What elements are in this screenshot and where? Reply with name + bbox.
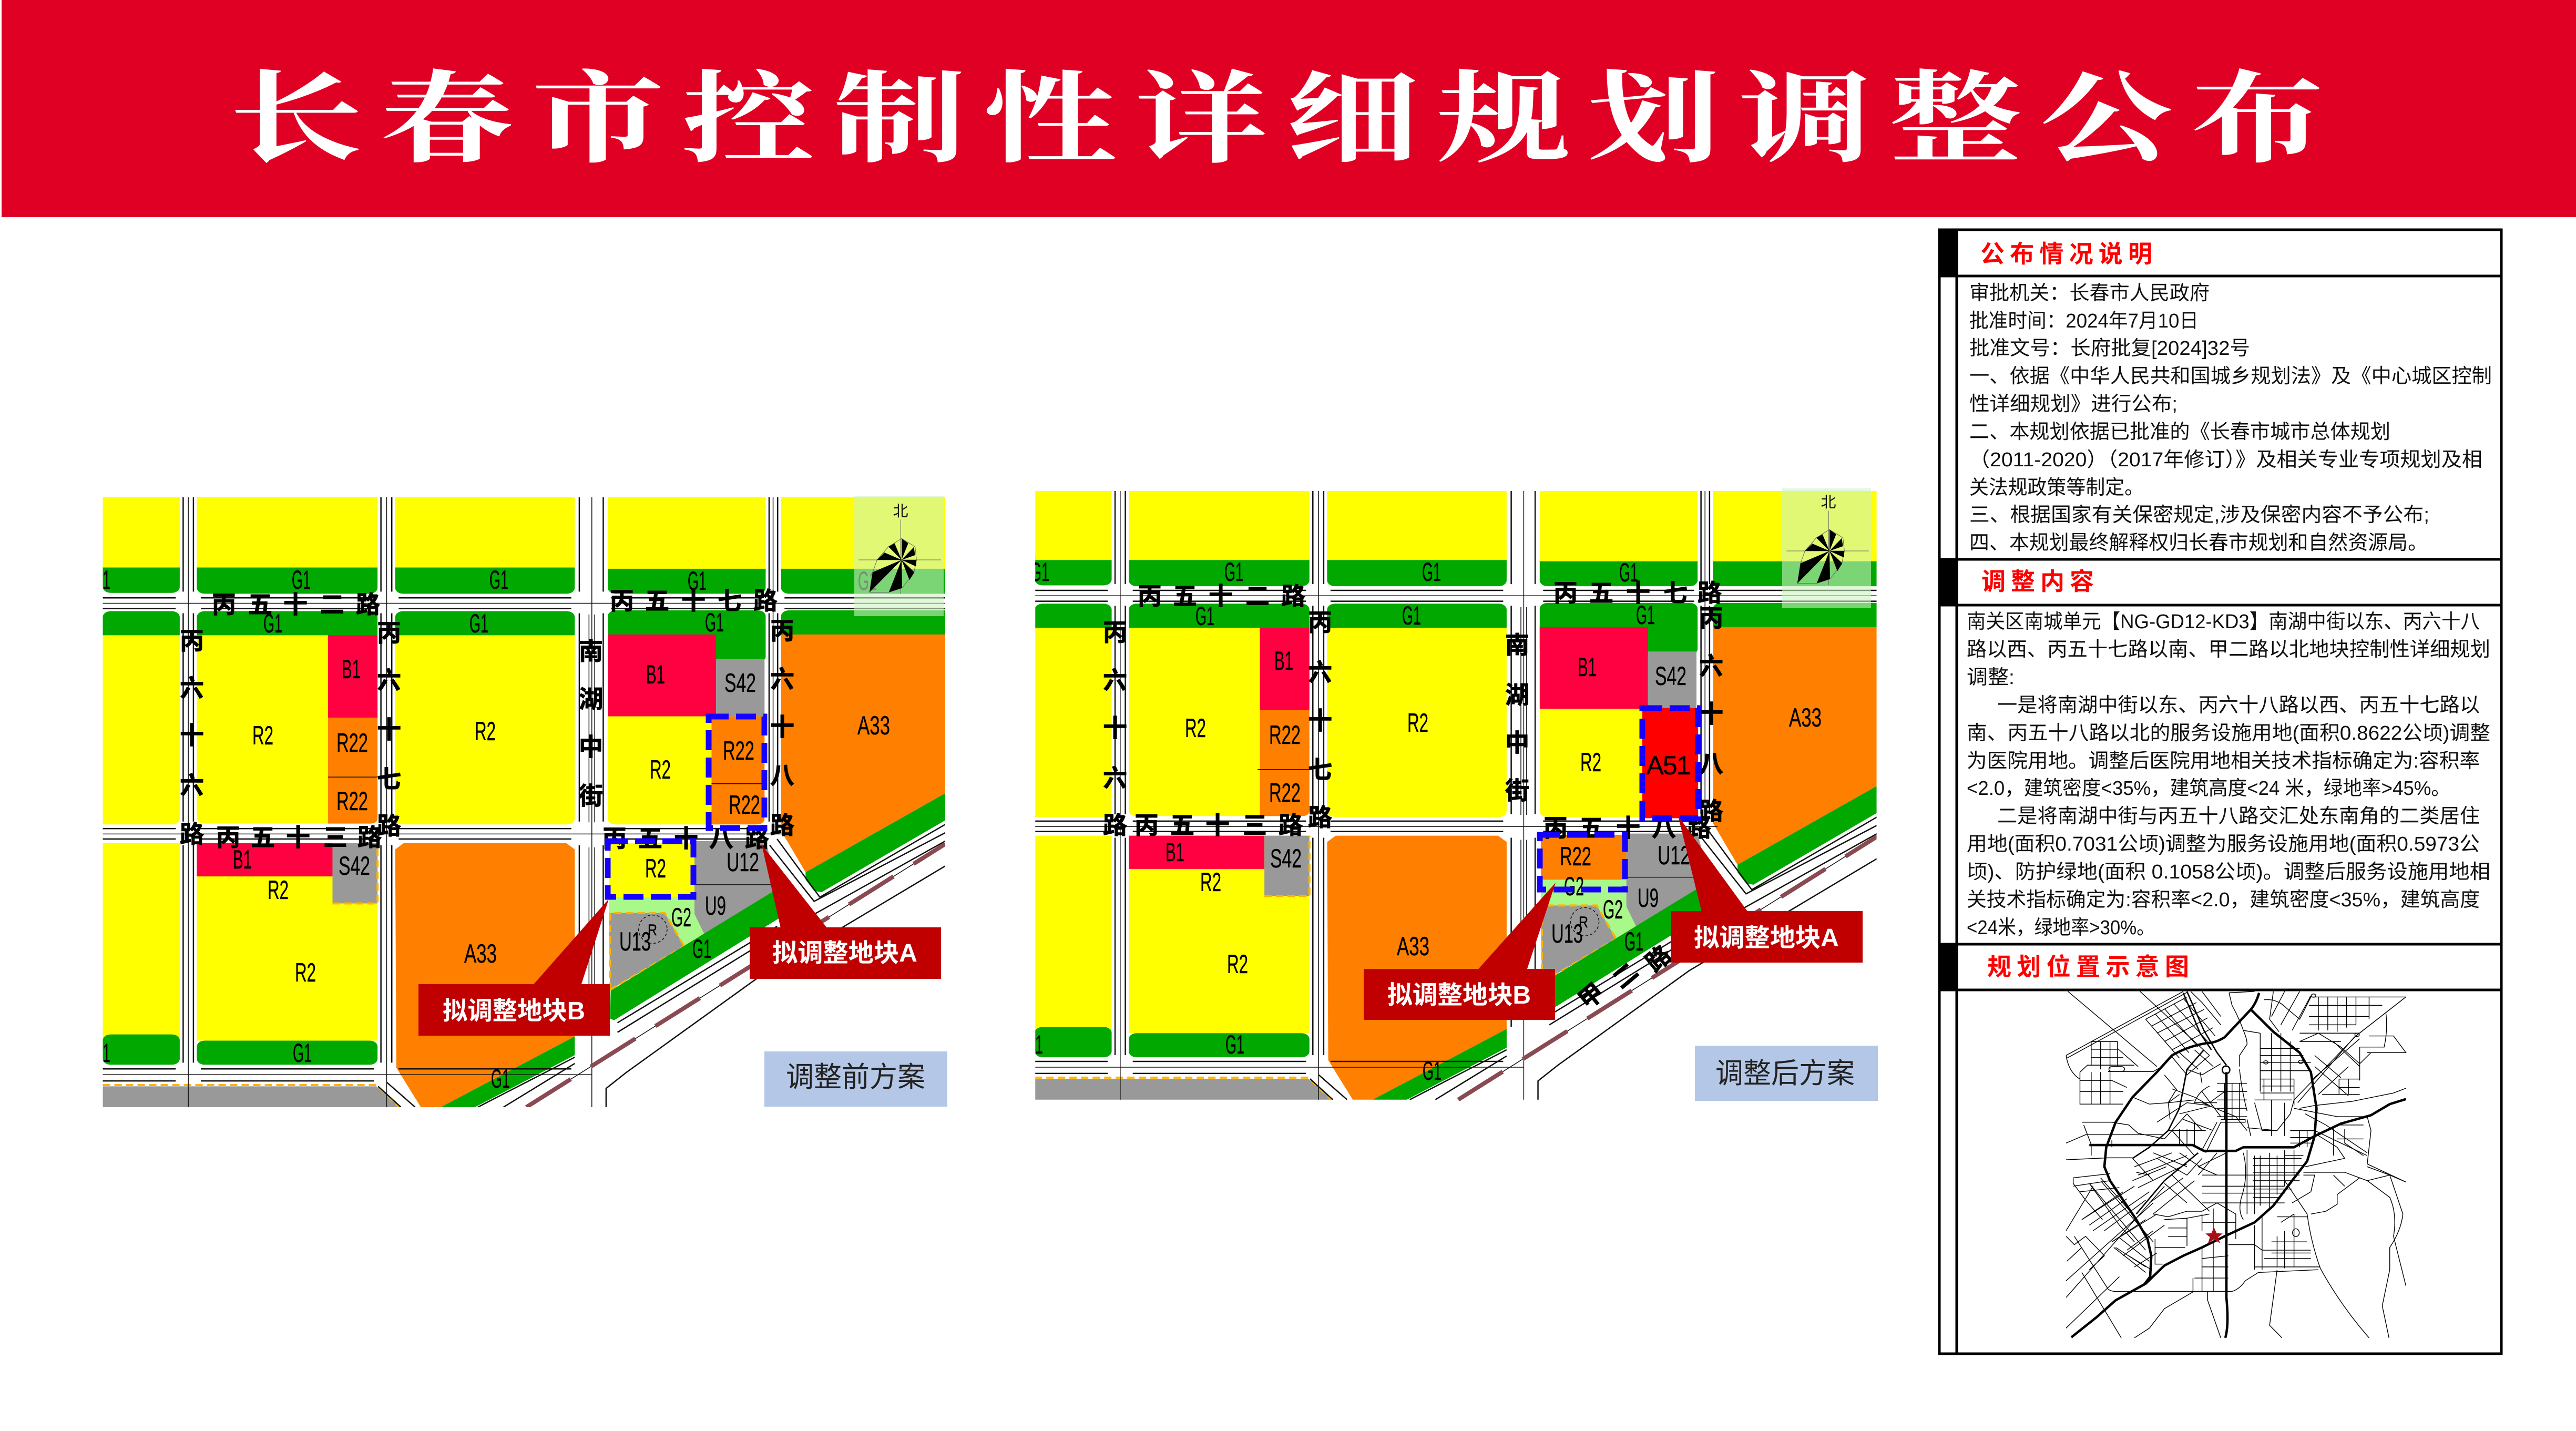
callout: plot B <box>418 899 610 1036</box>
land-use labels: before: G1 <box>292 565 311 595</box>
heading: publication notes: 公布情况说明 <box>1980 235 2152 270</box>
land-use labels: before: G1 <box>91 565 110 595</box>
land-use labels: after: U13 <box>1551 919 1583 948</box>
land-use labels: after: R2 <box>1407 708 1428 738</box>
land-use labels: before: A33 <box>464 939 497 968</box>
road names: before: 丙五十七路 <box>610 587 778 615</box>
text block: adjustment content: 关技术指标确定为:容积率<2.0，建筑密度<35%，建筑高度 <box>1967 889 2480 911</box>
land-use labels: before: B1 <box>342 655 361 684</box>
road names: before: 丙六十七路 <box>377 619 401 840</box>
land-use labels: before: R2 <box>475 717 496 746</box>
text block: adjustment content: 用地(面积0.7031公顷)调整为服务设施用地(面积0.5973公 <box>1967 833 2480 855</box>
land-use labels: after: G1 <box>1225 1030 1244 1059</box>
land-use labels: after: G1 <box>1402 601 1421 630</box>
road names: after <box>1103 579 1723 1014</box>
road names: after: 甲 <box>1573 978 1609 1014</box>
land-use labels: after: R2 <box>1580 748 1601 777</box>
land-use labels: after: S42 <box>1655 661 1686 691</box>
north arrow panel: after: 北 <box>1821 490 1836 512</box>
text block: adjustment content: 顷)、防护绿地(面积 0.1058公顷)。调整后服务设施用地相 <box>1967 861 2490 883</box>
callout: plot A: 拟调整地块A <box>772 939 917 967</box>
dashed outline: plot B after <box>1540 835 1625 890</box>
caption: after plan <box>1695 1046 1878 1101</box>
land-use labels: after: B1 <box>1578 652 1597 682</box>
text block: publication notes: 性详细规划》进行公布; <box>1969 393 2178 415</box>
land-use labels: before: R2 <box>645 854 666 883</box>
land-use labels: before: R2 <box>295 958 316 987</box>
heading: adjustment content: 调整内容 <box>1981 563 2094 597</box>
text block: publication notes: 一、依据《中华人民共和国城乡规划法》及《中心城区控制 <box>1969 365 2492 387</box>
location road map <box>2066 992 2406 1338</box>
text block: publication notes: 二、本规划依据已批准的《长春市城市总体规划 <box>1969 421 2390 443</box>
land-use labels: after: G1 <box>1619 558 1638 587</box>
text block: publication notes: （2011-2020）（2017年修订）》及相关专业专项规划及相 <box>1969 449 2482 471</box>
text block: publication notes: 批准文号：长府批复[2024]32号 <box>1969 338 2250 360</box>
callout: plot A <box>750 845 941 979</box>
text block: publication notes: 关法规政策等制定。 <box>1969 477 2144 499</box>
text block: adjustment content: 南关区南城单元【NG-GD12-KD3】南湖中街以东、丙六十八 <box>1967 611 2480 633</box>
land-use labels: after: B1 <box>1274 646 1293 676</box>
road names: before <box>180 587 794 852</box>
land-use labels: before <box>91 565 890 1093</box>
land-use labels: after: S42 <box>1270 844 1302 873</box>
text block: adjustment content: 一是将南湖中街以东、丙六十八路以西、丙五十七路以 <box>1997 694 2480 717</box>
north arrow panel: before: 北 <box>893 499 908 521</box>
land-use labels: after <box>1024 557 1822 1086</box>
land-use labels: after: G1 <box>1195 601 1214 631</box>
land-use labels: after: G1 <box>1422 557 1441 587</box>
land-use labels: before: U9 <box>705 891 726 921</box>
land-use labels: before: R2 <box>252 721 273 750</box>
land-use labels: before: G1 <box>469 609 488 638</box>
map: before adjustment <box>91 496 952 1107</box>
text block: adjustment content: 二是将南湖中街与丙五十八路交汇处东南角的二类居住 <box>1997 805 2480 827</box>
road names: after: 丙六十八路 <box>1699 605 1723 825</box>
road names: before: 丙五十三路 <box>216 824 382 851</box>
text block: adjustment content <box>1967 611 2490 939</box>
caption: before plan: 调整前方案 <box>786 1061 925 1093</box>
text block: adjustment content: 为医院用地。调整后医院用地相关技术指标确定为:容积率 <box>1967 750 2480 772</box>
land-use labels: before: R22 <box>729 790 760 820</box>
land-use labels: after: U9 <box>1638 883 1659 913</box>
text block: adjustment content: <2.0，建筑密度<35%，建筑高度<24 米，绿地率>45%。 <box>1967 778 2450 800</box>
north arrow panel: after <box>1782 488 1871 608</box>
text block: adjustment content: 调整: <box>1967 667 2015 689</box>
land-use labels: after: R2 <box>1200 867 1221 897</box>
road names: after: 南湖中街 <box>1505 631 1529 804</box>
callout: plot B: 拟调整地块B <box>443 997 585 1025</box>
land-use labels: before: B1 <box>646 660 665 689</box>
road names: after: 二 <box>1607 957 1643 994</box>
land-use labels: before: S42 <box>724 668 756 698</box>
land-use labels: after: G1 <box>1636 600 1655 630</box>
road names: after: 丙六十七路 <box>1308 609 1332 831</box>
land-use labels: before: B1 <box>233 845 252 874</box>
land-use labels: before: G1 <box>688 566 707 596</box>
land-use labels: after: R22 <box>1269 720 1301 750</box>
road names: after: 丙五十七路 <box>1553 579 1722 607</box>
land-use labels: before: G1 <box>91 1038 110 1068</box>
road names: after: 丙六十六路 <box>1103 619 1127 839</box>
land-use labels: before: G1 <box>858 566 877 596</box>
land-use labels: after: A33 <box>1789 703 1822 732</box>
land-use labels: before: R <box>648 922 657 939</box>
land-use labels: after: B1 <box>1166 837 1184 867</box>
road names: after: 丙五十三路 <box>1134 812 1303 839</box>
north arrow panel: before <box>854 496 944 616</box>
land-use labels: before: G1 <box>293 1038 312 1068</box>
land-use labels: after: R <box>1579 914 1588 931</box>
land-use labels: after: A51 <box>1647 751 1691 780</box>
land-use labels: after: G1 <box>1624 927 1643 956</box>
text block: adjustment content: 路以西、丙五十七路以南、甲二路以北地块控制性详细规划 <box>1967 639 2490 661</box>
title banner <box>2 0 2576 217</box>
land-use labels: after: R22 <box>1269 778 1301 808</box>
text block: publication notes: 审批机关：长春市人民政府 <box>1969 282 2210 304</box>
callout: plot B after: 拟调整地块B <box>1387 982 1531 1009</box>
land-use labels: after: G1 <box>1423 1056 1442 1086</box>
land-use labels: before: R22 <box>336 786 368 816</box>
land-use labels: before: R22 <box>723 736 754 765</box>
text block: adjustment content: <24米，绿地率>30%。 <box>1967 917 2155 939</box>
dashed outline: plot A before <box>709 717 764 828</box>
road names: before: 丙六十六路 <box>180 627 204 848</box>
road names: before: 丙六十八路 <box>770 617 794 839</box>
road names: after: 路 <box>1640 941 1677 977</box>
land-use labels: before: U12 <box>727 847 759 877</box>
land-use labels: before: R22 <box>336 728 368 758</box>
land-use labels: before: U13 <box>619 927 651 956</box>
icon: red star marker <box>2205 1228 2223 1243</box>
land-use labels: before: G2 <box>671 903 691 932</box>
land-use labels: before: S42 <box>339 851 370 881</box>
road names: after: 丙五十二路 <box>1138 582 1305 610</box>
land-use labels: after: G2 <box>1603 895 1623 924</box>
land-use labels: before: R2 <box>268 875 289 905</box>
land-use labels: before: G1 <box>705 608 724 637</box>
land-use labels: before: A33 <box>857 711 890 740</box>
callout: plot B after <box>1364 883 1556 1020</box>
road names: before: 丙五十二路 <box>212 591 380 618</box>
land-use labels: after: R2 <box>1227 949 1248 979</box>
title: 长春市控制性详细规划调整公布 <box>230 39 2324 182</box>
text block: publication notes: 批准时间：2024年7月10日 <box>1969 310 2199 332</box>
land-use labels: before: G1 <box>263 609 282 638</box>
land-use labels: before: G1 <box>491 1064 510 1093</box>
land-use labels: before: G1 <box>489 565 508 595</box>
text block: publication notes: 三、根据国家有关保密规定,涉及保密内容不予公布; <box>1969 504 2429 526</box>
land-use labels: after: U12 <box>1658 841 1690 870</box>
text block: adjustment content: 南、丙五十八路以北的服务设施用地(面积0.8622公顷)调整 <box>1967 722 2490 744</box>
dashed outline: plot A after <box>1642 708 1698 818</box>
map: after adjustment <box>1024 488 1884 1101</box>
heading: location map: 规划位置示意图 <box>1987 948 2189 983</box>
road names: before: 南湖中街 <box>579 638 603 810</box>
land-use labels: before: G1 <box>692 934 711 964</box>
land-use labels: after: R22 <box>1560 842 1591 871</box>
road names: after: 丙五十八路 <box>1543 814 1711 842</box>
dashed outline: plot B before <box>608 841 693 897</box>
land-use labels: after: G2 <box>1564 872 1584 901</box>
callout: plot A after: 拟调整地块A <box>1694 924 1839 952</box>
text block: publication notes: 四、本规划最终解释权归长春市规划和自然资源局。 <box>1969 532 2428 554</box>
land-use labels: after: G1 <box>1030 557 1049 587</box>
land-use labels: after: G1 <box>1224 557 1243 587</box>
land-use labels: after: A33 <box>1397 932 1429 961</box>
land-use labels: before: R2 <box>650 755 671 784</box>
side panel <box>1938 229 2502 1354</box>
text block: publication notes <box>1969 282 2492 554</box>
callout: plot A after <box>1671 816 1863 963</box>
caption: before plan <box>764 1051 947 1107</box>
land-use labels: after: R2 <box>1185 713 1206 743</box>
caption: after plan: 调整后方案 <box>1715 1058 1855 1089</box>
land-use labels: after: G1 <box>1024 1030 1043 1059</box>
road names: before: 丙五十八路 <box>602 825 769 852</box>
